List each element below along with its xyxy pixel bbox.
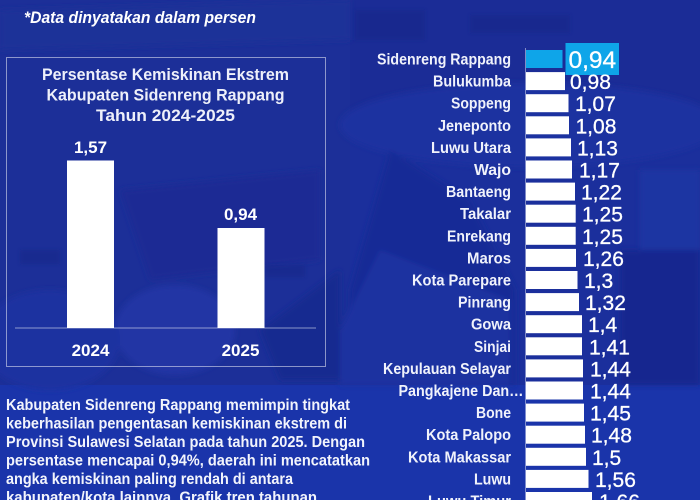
row: Maros xyxy=(467,248,624,271)
row: Bone: Bone xyxy=(476,405,511,422)
row: Bantaeng: 1,22 xyxy=(581,182,622,205)
row: Kota Makassar: Kota Makassar xyxy=(408,449,511,466)
bar: 2024: 1,57 xyxy=(74,138,107,157)
ranking bar chart xyxy=(377,43,640,500)
chart title: Persentase Kemiskinan Ekstrem xyxy=(42,66,289,84)
description text: Kabupaten Sidenreng Rappang memimpin tingkat xyxy=(6,397,350,414)
row: Sinjai xyxy=(474,336,630,359)
row: Enrekang: Enrekang xyxy=(447,228,511,245)
row: Kota Makassar: 1,5 xyxy=(592,447,621,470)
row: Enrekang xyxy=(447,226,623,249)
chart title xyxy=(42,66,289,125)
row: Jeneponto xyxy=(438,115,616,138)
highlighted row: Sidenreng Rappang xyxy=(377,43,619,75)
row: Kota Palopo xyxy=(426,425,632,448)
row: Bone xyxy=(476,403,631,426)
row: Jeneponto: 1,08 xyxy=(576,115,616,138)
row: Kepulauan Selayar: Kepulauan Selayar xyxy=(383,361,511,378)
row: Bulukumba: 0,98 xyxy=(570,71,611,94)
row: Gowa: Gowa xyxy=(471,317,511,334)
description text xyxy=(6,397,370,500)
row: Bulukumba xyxy=(433,71,611,94)
row: Pangkajene Dan...: Pangkajene Dan… xyxy=(398,383,524,400)
description text: Provinsi Sulawesi Selatan pada tahun 2025. Dengan xyxy=(6,434,365,451)
row: Luwu Utara: 1,13 xyxy=(577,137,618,160)
bar: 2024: 2024 xyxy=(72,341,110,360)
panel: bar chart 2024-2025 xyxy=(6,58,326,366)
row: Pangkajene Dan... xyxy=(398,380,631,404)
description text: angka kemiskinan paling rendah di antara xyxy=(6,471,293,488)
row: Sinjai: 1,41 xyxy=(589,336,630,359)
row: Luwu Utara: Luwu Utara xyxy=(431,140,511,157)
row: Pangkajene Dan...: 1,44 xyxy=(590,380,631,404)
bar: 2025: 2025 xyxy=(222,341,259,360)
row: Takalar xyxy=(460,204,623,227)
row: Wajo: 1,17 xyxy=(579,160,620,182)
row: Takalar: Takalar xyxy=(460,206,511,223)
bar: 2025: 0,94 xyxy=(224,205,258,224)
row: Takalar: 1,25 xyxy=(582,204,623,227)
highlighted row: Sidenreng Rappang: Sidenreng Rappang xyxy=(377,52,511,68)
row: Wajo: Wajo xyxy=(474,162,511,179)
row: Gowa xyxy=(471,314,618,337)
description text: keberhasilan pengentasan kemiskinan ekstrem di xyxy=(6,416,347,432)
row: Pinrang: 1,32 xyxy=(585,292,626,315)
row: Luwu: 1,56 xyxy=(595,469,636,492)
row: Bulukumba: Bulukumba xyxy=(433,74,511,91)
row: Kepulauan Selayar: 1,44 xyxy=(590,358,631,381)
row: Kota Palopo: 1,48 xyxy=(591,425,632,448)
row: Soppeng xyxy=(451,93,616,116)
row: Kota Parepare: 1,3 xyxy=(584,270,613,293)
highlighted row: Sidenreng Rappang: 0,94 xyxy=(568,47,616,74)
row: Kota Palopo: Kota Palopo xyxy=(426,427,511,444)
row: Wajo xyxy=(474,160,620,182)
row: Pinrang: Pinrang xyxy=(458,295,511,312)
row: Kepulauan Selayar xyxy=(383,358,631,381)
row: Jeneponto: Jeneponto xyxy=(438,118,511,135)
row: Pinrang xyxy=(458,292,626,315)
description text: persentase mencapai 0,94%, daerah ini mencatatkan xyxy=(6,452,370,470)
footnote: *Data dinyatakan dalam persen xyxy=(24,9,256,27)
row: Kota Parepare xyxy=(412,270,613,293)
chart title: Kabupaten Sidenreng Rappang xyxy=(46,86,284,104)
row: Gowa: 1,4 xyxy=(588,314,618,337)
row: Kota Parepare: Kota Parepare xyxy=(412,272,511,290)
row: Luwu Utara xyxy=(431,137,618,160)
row: Soppeng: Soppeng xyxy=(451,96,511,113)
row: Bantaeng xyxy=(446,182,622,205)
row: Maros: Maros xyxy=(467,250,511,267)
row: Luwu xyxy=(474,469,636,492)
row: Soppeng: 1,07 xyxy=(575,93,616,116)
row: Sinjai: Sinjai xyxy=(474,339,511,356)
row: Luwu: Luwu xyxy=(474,471,511,488)
row: Luwu Timur xyxy=(428,491,640,500)
row: Bone: 1,45 xyxy=(590,403,631,426)
chart title: Tahun 2024-2025 xyxy=(96,107,235,125)
bar: 2025 xyxy=(218,205,264,360)
row: Enrekang: 1,25 xyxy=(582,226,623,249)
row: Bantaeng: Bantaeng xyxy=(446,184,511,201)
bar: 2024 xyxy=(67,138,114,360)
row: Kota Makassar xyxy=(408,447,621,470)
row: Maros: 1,26 xyxy=(583,248,624,271)
